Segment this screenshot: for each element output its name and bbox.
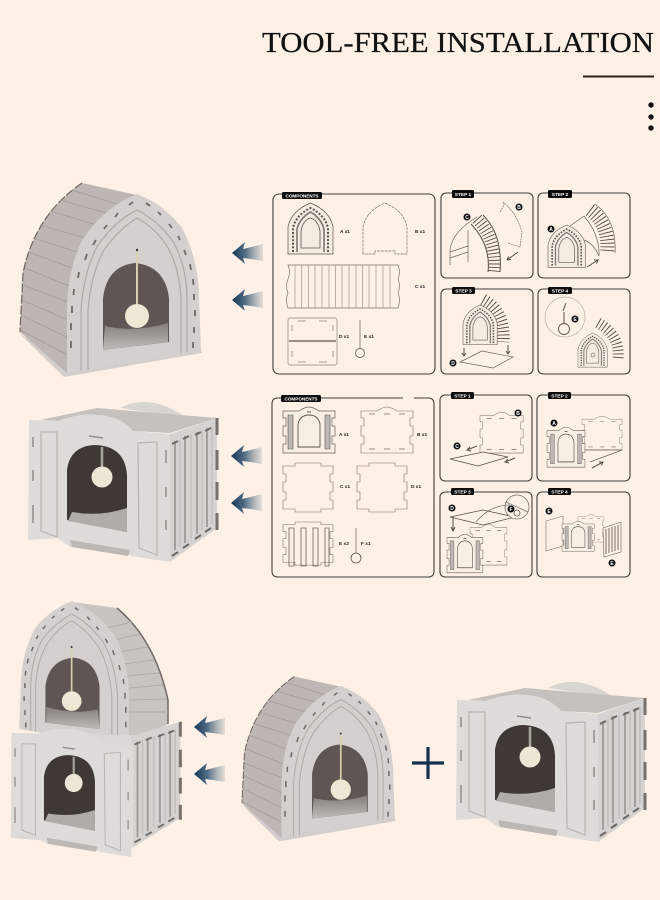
panel: box step 4: STEP 4 — [551, 490, 568, 496]
panel: arch step 2: STEP 2 — [552, 192, 569, 198]
panel: box step 3: D — [450, 506, 454, 512]
panel: box step 4: E — [547, 509, 551, 515]
panel: box step 4 — [537, 488, 630, 577]
panel: box step 3: F — [509, 507, 513, 513]
panel: box step 3 — [440, 488, 532, 577]
panel: arch step 1: C — [465, 215, 469, 221]
panel: box components: B x1 — [417, 432, 427, 438]
panel: arch step 3: STEP 3 — [455, 288, 472, 294]
three dots menu — [648, 102, 654, 131]
panel: box components: F x1 — [361, 541, 371, 547]
panel: box step 4: E — [610, 561, 614, 567]
panel: arch step 3: D — [451, 361, 455, 367]
panel: arch step 1: STEP 1 — [455, 192, 472, 198]
panel: arch components — [273, 192, 435, 374]
panel: arch components: C x1 — [415, 284, 425, 290]
panel: arch step 4: STEP 4 — [552, 288, 569, 294]
panel: box step 1: B — [516, 411, 520, 417]
panel: arch step 4 — [538, 287, 630, 374]
panel: arch step 4: E — [573, 317, 577, 323]
arrows: stacked house — [194, 716, 225, 785]
panel: box components — [272, 395, 434, 577]
panel: box step 2: STEP 2 — [551, 394, 568, 400]
panel: arch components: E x1 — [364, 334, 374, 340]
title underline — [583, 76, 654, 78]
panel: box step 1 — [440, 392, 532, 481]
arrows: box house — [231, 445, 262, 514]
panel: arch components: D x1 — [339, 334, 349, 340]
panel: arch step 1 — [441, 190, 533, 278]
panel: arch step 1: B — [517, 205, 521, 211]
panel: arch components: COMPONENTS — [286, 194, 318, 199]
panel: box components: A x1 — [339, 432, 349, 438]
arch house module — [241, 677, 396, 841]
arch cat house photo — [19, 183, 202, 377]
panel: box step 2 — [537, 392, 630, 481]
panel: box components: C x1 — [340, 484, 350, 490]
box cat house photo — [28, 402, 217, 562]
panel: box step 2: A — [552, 421, 556, 427]
panel: box components: E x2 — [339, 541, 349, 547]
panel: arch step 2: A — [549, 227, 553, 233]
arrows: arch house — [232, 242, 263, 311]
panel: arch components: A x1 — [340, 229, 350, 235]
panel: arch step 3 — [441, 287, 533, 374]
title: TOOL-FREE INSTALLATION — [262, 28, 654, 59]
panel: box step 1: STEP 1 — [454, 394, 471, 400]
stacked cat house photo — [11, 601, 180, 857]
panel: arch components: B x1 — [415, 229, 425, 235]
plus sign — [412, 747, 444, 779]
panel: box step 1: C — [455, 444, 459, 450]
box house module — [456, 682, 645, 842]
panel: arch step 2 — [538, 190, 630, 278]
panel: box components: D x1 — [411, 484, 421, 490]
panel: box step 3: STEP 3 — [454, 490, 471, 496]
panel: box components: COMPONENTS — [285, 397, 317, 402]
